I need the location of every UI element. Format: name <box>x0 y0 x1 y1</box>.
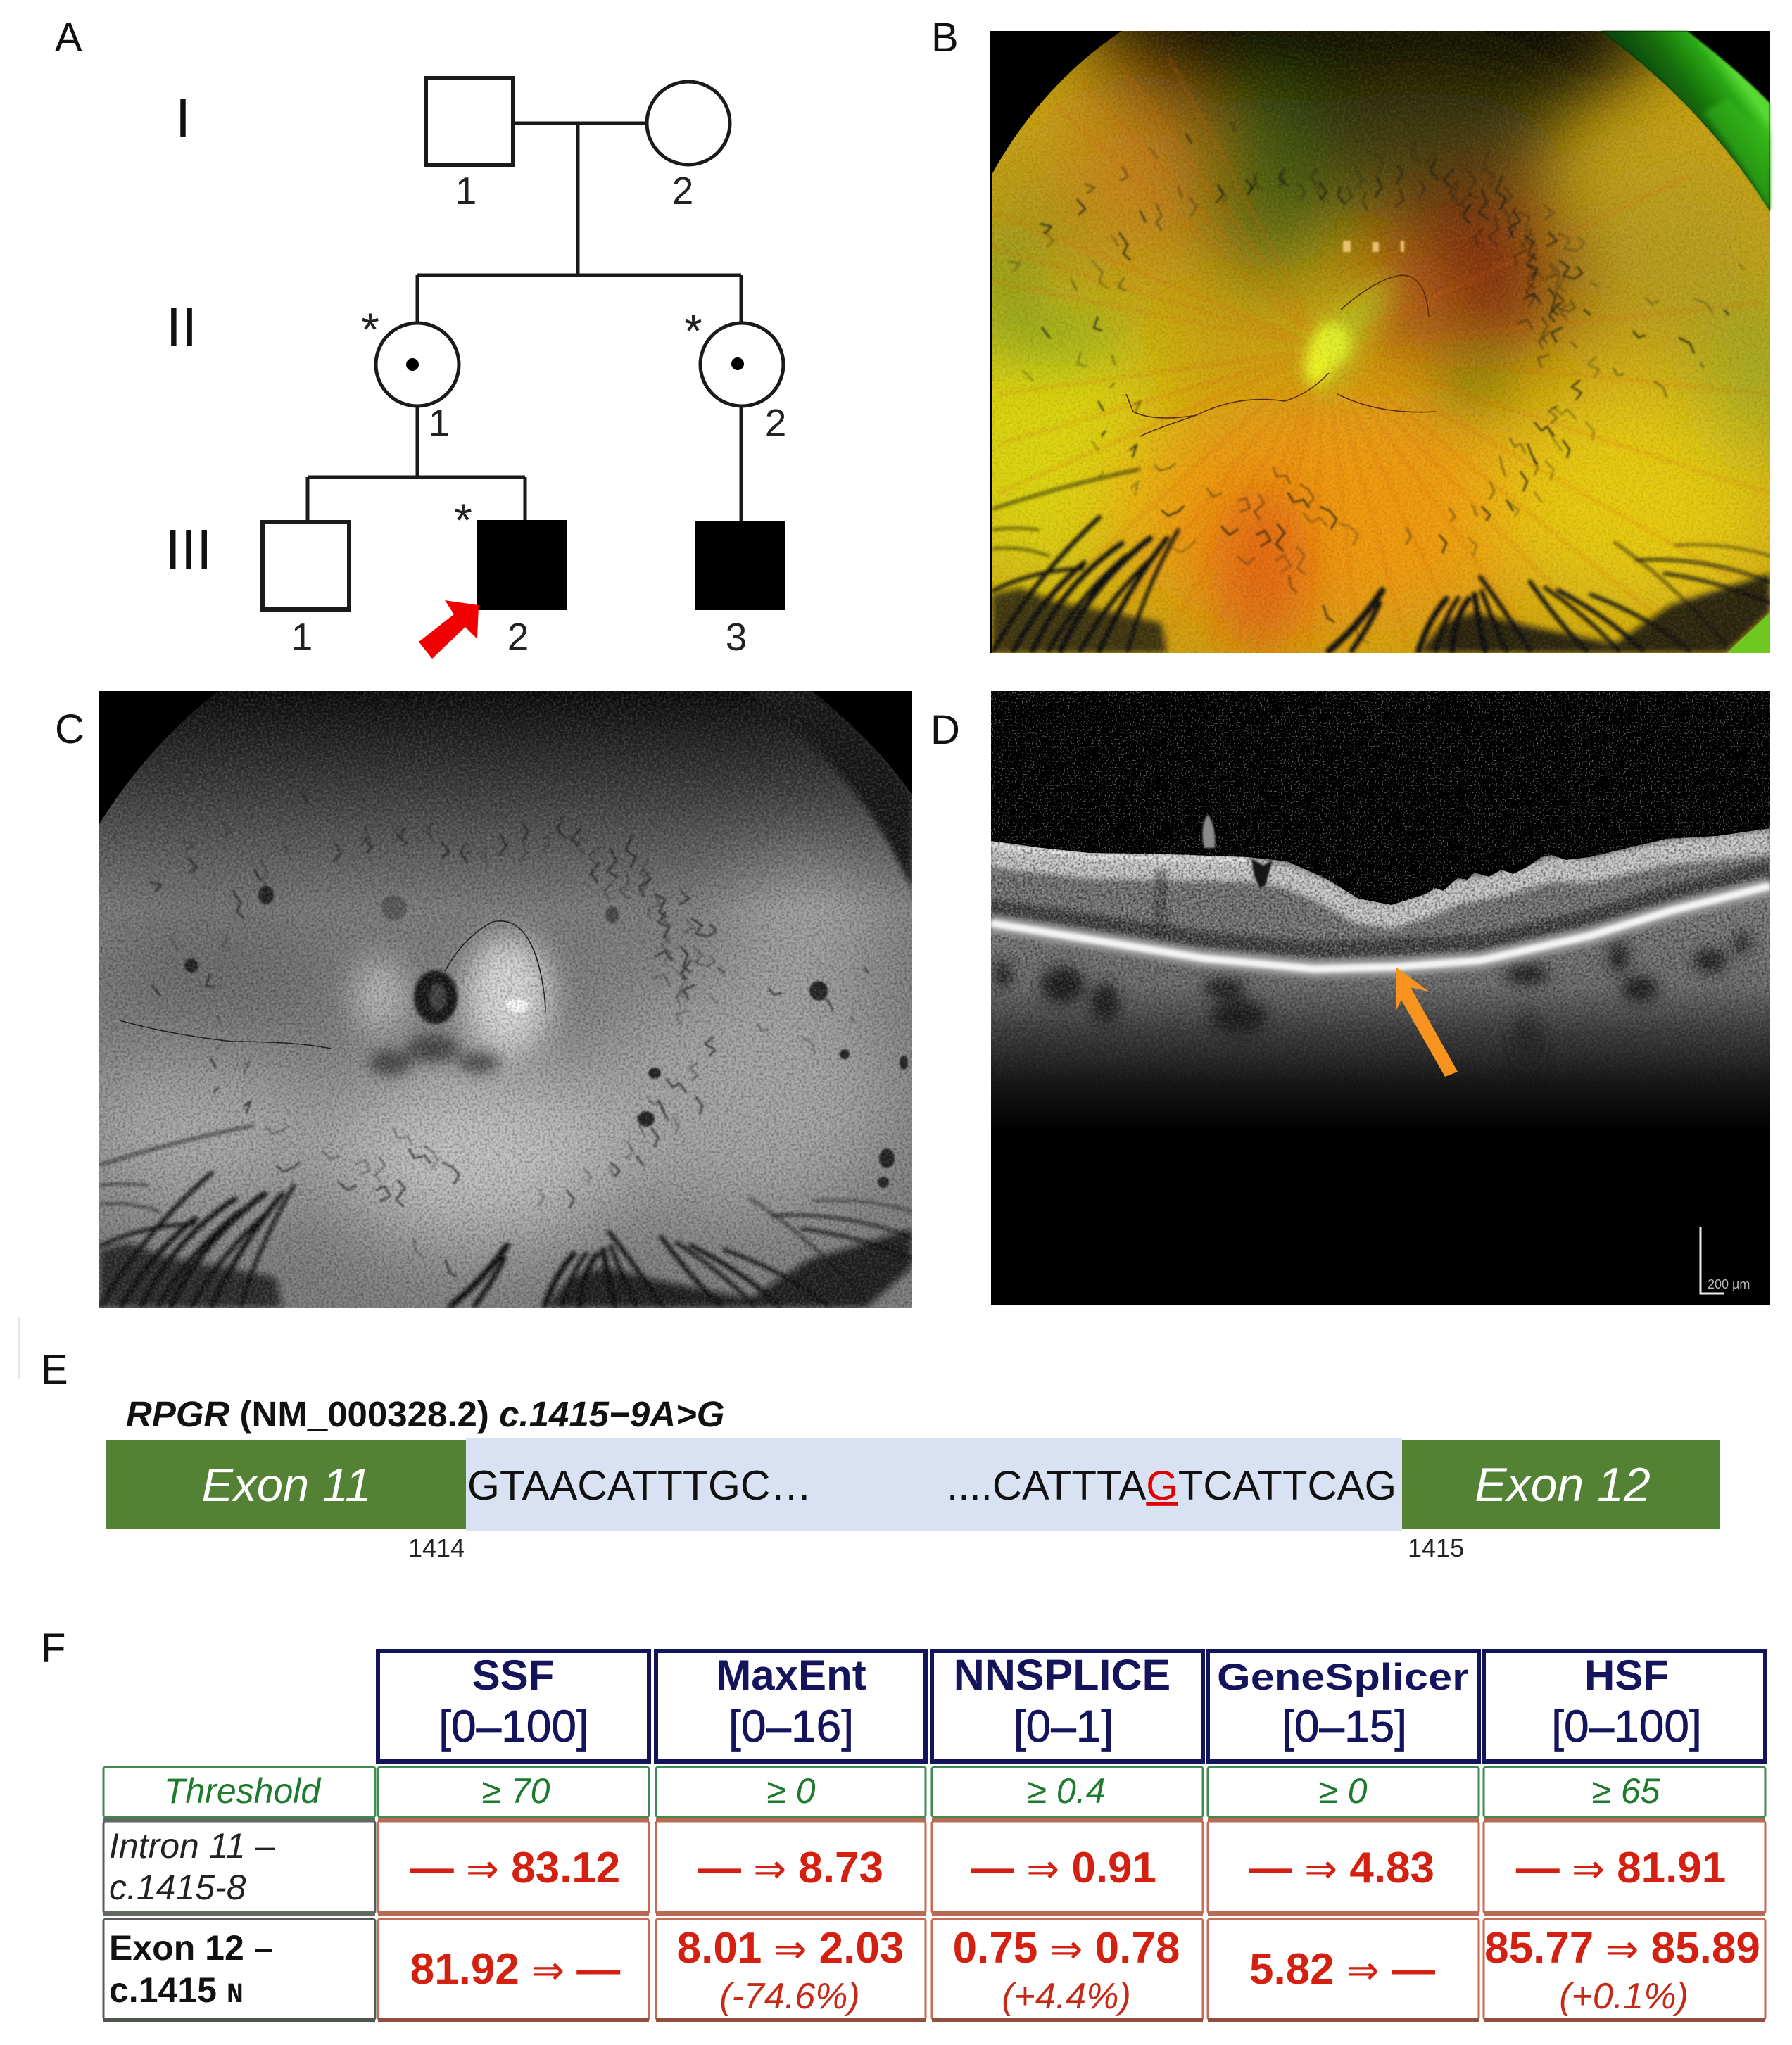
row: intron 11 c.1415-8: — ⇒ 83.12 <box>410 1844 620 1892</box>
panel B: colour fundus photograph <box>922 0 1792 680</box>
panel F: splice prediction table: [0–15] <box>1282 1701 1407 1752</box>
intron sequence <box>467 1462 1396 1509</box>
autofluorescence specks <box>149 775 870 1278</box>
individual III-1 unaffected male <box>263 522 349 609</box>
individual numbers and asterisks: * <box>454 494 472 546</box>
bright macular and peripapillary zones <box>352 936 552 1056</box>
individual I-2 unaffected female <box>647 82 730 165</box>
row: exon 12 c.1415 N: (-74.6%) <box>719 1976 860 2017</box>
scale bar: 200 µm <box>1708 1277 1750 1291</box>
RPE bright band <box>991 886 1770 969</box>
panel F: splice prediction table <box>41 1626 1765 2020</box>
row: exon 12 c.1415 N: 85.77 ⇒ 85.89 <box>1484 1924 1760 1973</box>
row: exon 12 c.1415 N: 5.82 ⇒ — <box>1249 1945 1435 1994</box>
individual I-1 unaffected male <box>426 78 513 165</box>
row: exon 12 c.1415 N <box>103 1919 1765 2020</box>
individual numbers and asterisks: 2 <box>507 615 529 659</box>
choroid <box>991 880 1770 1140</box>
individual numbers and asterisks: 1 <box>429 401 450 445</box>
row: intron 11 c.1415-8 <box>103 1820 1765 1913</box>
scale bar <box>1700 1227 1750 1293</box>
individual numbers and asterisks <box>291 169 786 659</box>
individual II-1 carrier female <box>376 323 459 406</box>
individual numbers and asterisks: 2 <box>672 169 693 213</box>
neurosensory retina <box>991 823 1770 985</box>
individual II-2 carrier female <box>700 323 783 406</box>
panel F: splice prediction table: [0–16] <box>728 1701 854 1752</box>
retinal vessels <box>1126 275 1436 436</box>
row: exon 12 c.1415 N: 8.01 ⇒ 2.03 <box>677 1924 904 1973</box>
panel F: splice prediction table: F <box>41 1626 65 1671</box>
row: exon 12 c.1415 N: 0.75 ⇒ 0.78 <box>953 1924 1180 1973</box>
generation labels: I <box>175 87 191 149</box>
cDNA position labels <box>408 1533 1464 1562</box>
individual III-2 affected male proband <box>477 520 567 610</box>
panel C: fundus autofluorescence: C <box>55 707 84 752</box>
flash artefact <box>1343 241 1404 252</box>
variant heading: RPGR (NM_000328.2) c.1415−9A>G <box>126 1394 724 1434</box>
panel F: splice prediction table: [0–100] <box>438 1701 589 1752</box>
panel E: variant schematic <box>19 1317 1720 1562</box>
individual numbers and asterisks: 1 <box>291 615 313 659</box>
table column headers <box>378 1651 1765 1761</box>
individual numbers and asterisks: 2 <box>765 401 786 445</box>
panel F: splice prediction table: GeneSplicer <box>1217 1657 1469 1698</box>
row: exon 12 c.1415 N: (+4.4%) <box>1002 1976 1131 2017</box>
panel B: colour fundus photograph: B <box>931 15 959 61</box>
panel F: splice prediction table: HSF <box>1584 1652 1669 1699</box>
cDNA position labels: 1414 <box>408 1533 465 1562</box>
exon 11 bar: Exon 11 <box>202 1459 371 1512</box>
green reflection band <box>1601 31 1770 653</box>
generation labels: II <box>166 296 197 358</box>
intron 11 bar <box>466 1438 1402 1531</box>
individual numbers and asterisks: * <box>361 303 379 355</box>
icon: red proband arrow <box>419 600 479 659</box>
row: exon 12 c.1415 N: (+0.1%) <box>1559 1976 1689 2017</box>
row: intron 11 c.1415-8: Intron 11 – <box>109 1826 276 1866</box>
row: exon 12 c.1415 N: 81.92 ⇒ — <box>410 1945 620 1994</box>
individual III-3 affected male <box>695 521 785 610</box>
optic disc <box>1299 278 1397 394</box>
panel F: splice prediction table: NNSPLICE <box>954 1651 1171 1699</box>
optic disc <box>414 970 458 1024</box>
panel F: splice prediction table: MaxEnt <box>716 1652 866 1699</box>
individual numbers and asterisks: 1 <box>455 169 477 213</box>
panel A: pedigree: A <box>55 15 82 61</box>
panel A: pedigree <box>55 15 786 659</box>
individual numbers and asterisks: 3 <box>726 615 747 659</box>
panel F: splice prediction table: SSF <box>472 1652 554 1699</box>
individual numbers and asterisks: * <box>684 305 702 357</box>
intron sequence: GTAACATTTGC… <box>467 1462 812 1509</box>
row: intron 11 c.1415-8: — ⇒ 81.91 <box>1516 1844 1726 1892</box>
generation labels: III <box>165 518 212 581</box>
vitreous floater <box>1202 814 1215 848</box>
panel C: fundus autofluorescence <box>55 691 912 1312</box>
panel D: OCT scan <box>930 691 1770 1305</box>
intron sequence: ....CATTTAGTCATTCAG <box>947 1463 1396 1509</box>
row: intron 11 c.1415-8: — ⇒ 8.73 <box>698 1844 883 1892</box>
panel F: splice prediction table: [0–100] <box>1551 1701 1702 1752</box>
threshold row: ≥ 70 <box>482 1771 550 1811</box>
threshold row: ≥ 0 <box>766 1771 816 1811</box>
threshold row: ≥ 0.4 <box>1028 1771 1105 1811</box>
icon: orange arrow <box>1396 967 1458 1077</box>
threshold row <box>103 1767 1765 1817</box>
row: exon 12 c.1415 N: c.1415 N <box>109 1970 244 2011</box>
panel E: variant schematic: E <box>41 1347 68 1393</box>
threshold row: ≥ 0 <box>1318 1771 1368 1811</box>
exon 12 bar <box>1402 1440 1720 1529</box>
threshold row: ≥ 65 <box>1592 1771 1660 1811</box>
exon 12 bar: Exon 12 <box>1475 1458 1651 1512</box>
row: exon 12 c.1415 N: Exon 12 – <box>109 1928 273 1968</box>
row: intron 11 c.1415-8: — ⇒ 0.91 <box>971 1844 1156 1892</box>
row: intron 11 c.1415-8: — ⇒ 4.83 <box>1249 1844 1434 1892</box>
row: intron 11 c.1415-8: c.1415-8 <box>109 1868 246 1907</box>
panel F: splice prediction table: [0–1] <box>1014 1701 1113 1752</box>
exon 11 bar <box>106 1440 466 1529</box>
panel D: OCT scan: D <box>930 707 960 753</box>
threshold row: Threshold <box>164 1771 322 1811</box>
cDNA position labels: 1415 <box>1408 1533 1464 1562</box>
generation labels <box>165 87 212 581</box>
